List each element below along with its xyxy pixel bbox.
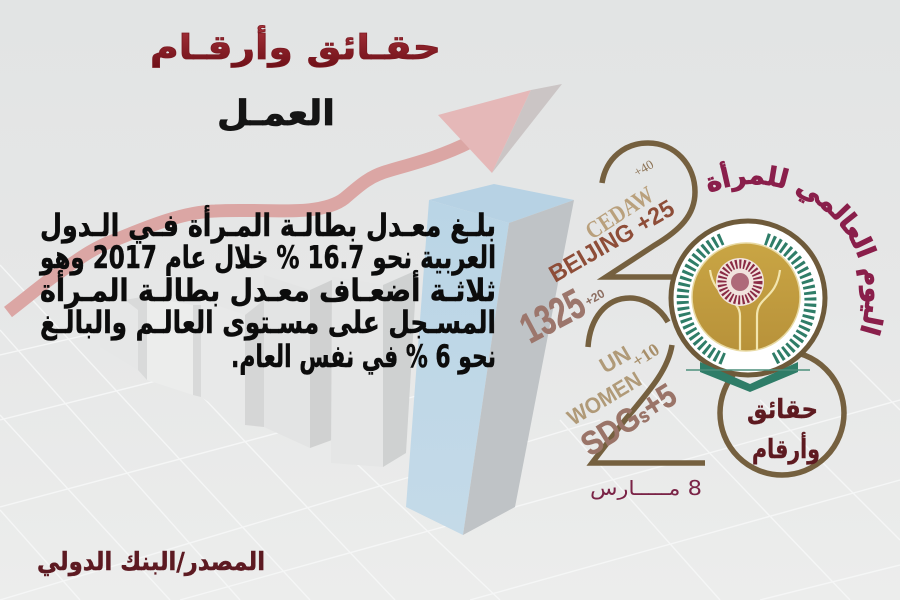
body paragraph: نحو 6 % في نفس العام. [231,339,496,375]
hands holding [710,270,780,350]
numeral 0 small ring [720,351,844,475]
bar 3 [201,300,264,427]
gold disc [692,243,800,351]
un women label: UN [595,341,635,378]
wreath [683,239,810,360]
bar 1 [100,296,147,380]
body paragraph [39,205,496,375]
ring text [747,395,820,465]
bar 2 [147,297,201,397]
emblem disc [671,221,825,375]
plus 40 label: +40 [631,156,656,180]
sdgs label: SDGs+5 [574,376,683,463]
source: المصدر/البنك الدولي [37,547,265,577]
subtitle: العمـل [217,94,335,134]
un women label: WOMEN [563,367,646,430]
body paragraph: العربية نحو 16.7 % خلال عام 2017 وهو [39,240,496,276]
title: حقـائق وأرقـام [150,25,441,68]
1325 label: 1325 [512,279,592,352]
curved heading: اليوم العالمي للمرأة [708,160,884,336]
numeral 2 lower [588,298,705,463]
bar 4 [264,275,332,448]
blue highlighted bar [406,184,574,535]
plus 10 label: +10 [628,339,663,371]
calligraphy seal [716,258,764,306]
bar 5 [331,270,417,467]
perspective floor grid [0,265,900,600]
beijing label: BEIJING +25 [544,195,679,288]
bar chart [100,184,574,535]
date: 8 مـــــارس [590,476,702,500]
cedaw label: CEDAW [581,182,659,245]
body paragraph: بلـغ معـدل بطالـة المـرأة فـي الـدول [40,205,496,244]
body paragraph: المسـجل على مسـتوى العالـم والبالـغ [40,305,496,341]
ring text: حقائق [747,395,818,425]
ring text: وأرقام [752,432,820,465]
logo: women's day 2020 emblem [512,140,884,500]
red rising arrow [8,84,562,312]
numeral 2 upper [602,143,695,277]
body paragraph: ثلاثـة أضعـاف معـدل بطالـة المـرأة [40,270,496,309]
plus 20 label: +20 [582,286,607,309]
open book [686,362,810,392]
